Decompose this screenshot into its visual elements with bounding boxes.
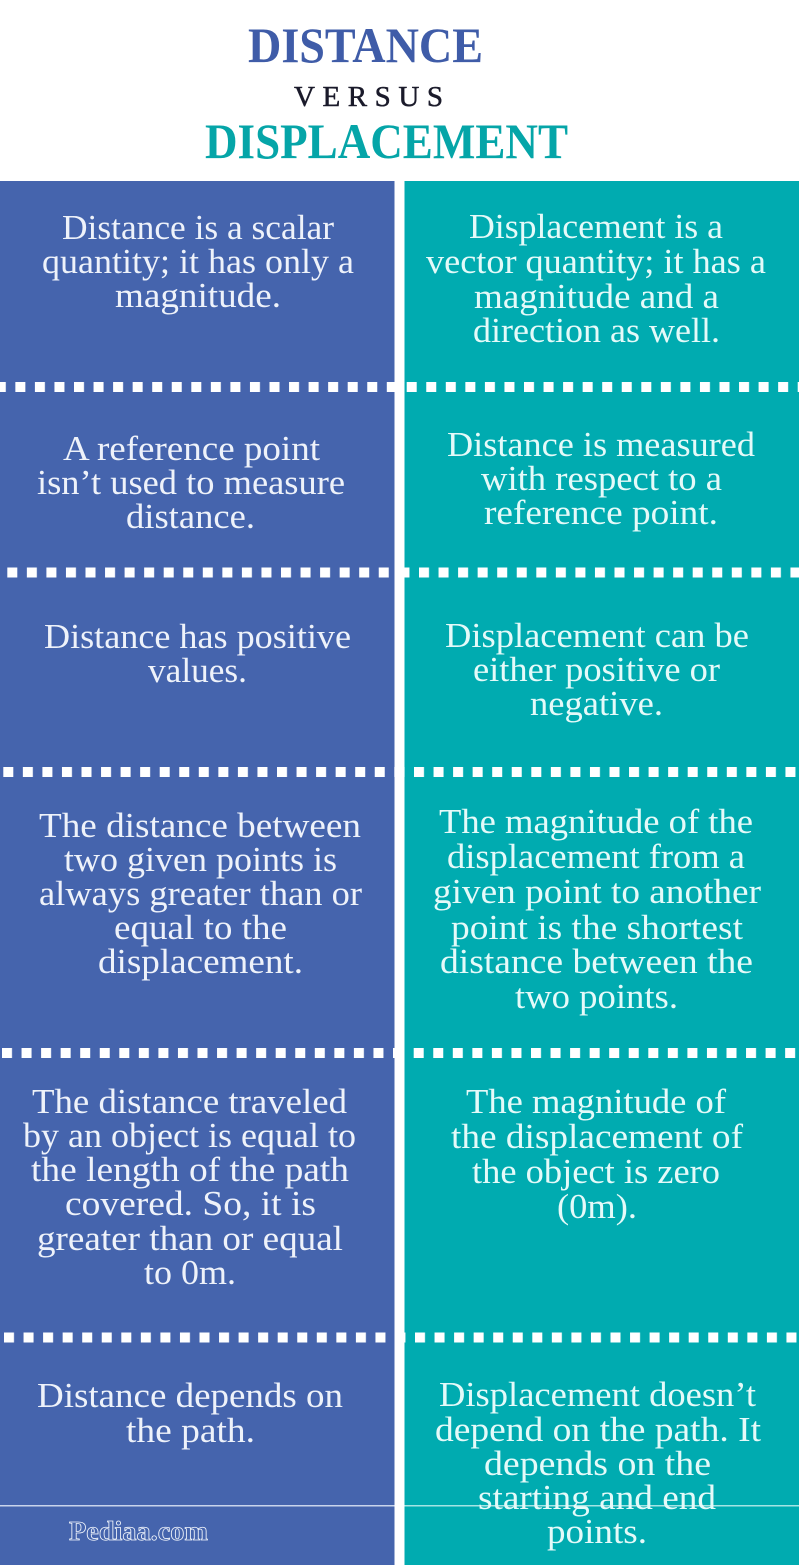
- text: distance row 6: Distance depends on: [37, 1376, 343, 1415]
- text: distance row 3: [44, 617, 351, 690]
- text: displacement row 2: Distance is measured: [447, 425, 756, 464]
- text: displacement row 6: [435, 1375, 761, 1551]
- text: distance row 3: values.: [148, 651, 247, 690]
- text: distance row 5: covered. So, it is: [65, 1184, 316, 1223]
- text: distance row 4: always greater than or: [39, 874, 362, 913]
- text: distance row 1: [42, 208, 354, 315]
- text: distance row 4: equal to the: [114, 908, 287, 947]
- text: distance row 1: Distance is a scalar: [62, 208, 334, 247]
- heading: versus: VERSUS: [294, 81, 443, 113]
- text: displacement row 1: Displacement is a: [469, 207, 723, 246]
- text: distance row 6: the path.: [126, 1411, 255, 1450]
- text: displacement row 2: [447, 425, 756, 532]
- heading: Distance: DISTANCE: [248, 17, 483, 73]
- title: Distance versus Displacement: [205, 17, 568, 169]
- text: displacement row 2: with respect to a: [481, 459, 722, 498]
- text: distance row 5: the length of the path: [31, 1150, 350, 1189]
- text: displacement row 4: [433, 802, 761, 1016]
- text: displacement row 1: magnitude and a: [474, 277, 719, 316]
- text: distance row 1: magnitude.: [115, 276, 281, 315]
- panel: displacement column background: [404, 181, 799, 1565]
- text: displacement row 4: displacement from a: [447, 837, 745, 876]
- text: distance row 5: by an object is equal to: [23, 1116, 356, 1155]
- text: distance row 1: quantity; it has only a: [42, 242, 354, 281]
- text: displacement row 4: given point to another: [433, 872, 761, 911]
- text: displacement row 4: point is the shortest: [451, 908, 743, 947]
- text: displacement row 5: [451, 1082, 743, 1226]
- text: distance row 4: two given points is: [64, 840, 337, 879]
- text: distance row 2: A reference point: [63, 429, 320, 468]
- text: distance row 2: distance.: [126, 497, 255, 536]
- text: displacement row 3: either positive or: [473, 650, 720, 689]
- text: distance row 2: [37, 429, 345, 536]
- text: distance row 5: The distance traveled: [32, 1082, 348, 1121]
- text: displacement row 4: The magnitude of the: [439, 802, 753, 841]
- text: distance row 4: The distance between: [39, 806, 361, 845]
- text: displacement row 5: (0m).: [557, 1187, 637, 1226]
- panel: distance column background: [0, 181, 394, 1565]
- text: displacement row 6: points.: [547, 1512, 647, 1551]
- text: displacement row 3: Displacement can be: [445, 616, 749, 655]
- logo: Pediaa.com: Pediaa.com: [69, 1516, 209, 1546]
- text: displacement row 6: depend on the path. It: [435, 1410, 761, 1449]
- text: displacement row 6: Displacement doesn’t: [439, 1375, 756, 1414]
- text: displacement row 4: two points.: [515, 977, 678, 1016]
- text: displacement row 1: vector quantity; it has a: [426, 242, 766, 281]
- text: displacement row 6: depends on the: [484, 1444, 711, 1483]
- text: distance row 5: [23, 1082, 356, 1292]
- heading: Displacement: DISPLACEMENT: [205, 113, 568, 169]
- text: displacement row 1: [426, 207, 766, 350]
- text: displacement row 3: [445, 616, 749, 723]
- text: displacement row 3: negative.: [530, 684, 663, 723]
- text: distance row 2: isn’t used to measure: [37, 463, 345, 502]
- text: distance row 5: to 0m.: [144, 1253, 236, 1292]
- text: distance row 5: greater than or equal: [37, 1219, 343, 1258]
- text: distance row 6: [37, 1376, 343, 1450]
- text: displacement row 5: the displacement of: [451, 1117, 743, 1156]
- text: displacement row 5: The magnitude of: [466, 1082, 726, 1121]
- text: displacement row 2: reference point.: [484, 493, 718, 532]
- text: distance row 4: [39, 806, 362, 981]
- text: displacement row 5: the object is zero: [472, 1152, 720, 1191]
- text: displacement row 1: direction as well.: [473, 311, 720, 350]
- text: distance row 4: displacement.: [98, 942, 303, 981]
- text: displacement row 4: distance between the: [440, 942, 753, 981]
- text: distance row 3: Distance has positive: [44, 617, 351, 656]
- text: displacement row 6: starting and end: [478, 1478, 717, 1517]
